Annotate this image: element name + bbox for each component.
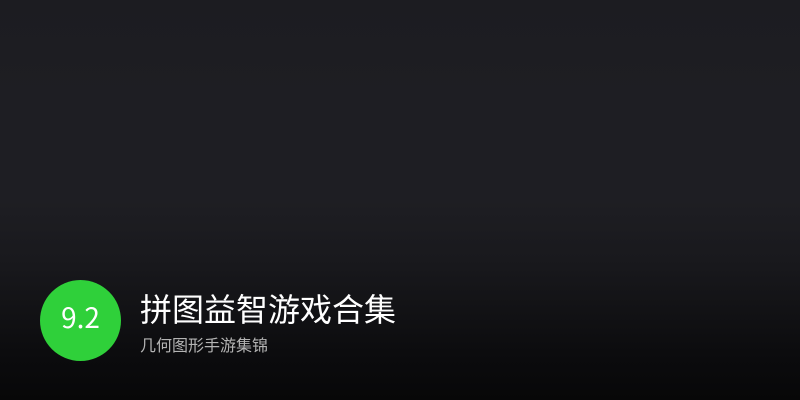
- score badge: 9.2: [40, 280, 121, 361]
- score badge: 9.2: 9.2: [61, 297, 100, 337]
- title: 拼图益智游戏合集: [140, 292, 396, 328]
- subtitle: 几何图形手游集锦: [140, 338, 268, 355]
